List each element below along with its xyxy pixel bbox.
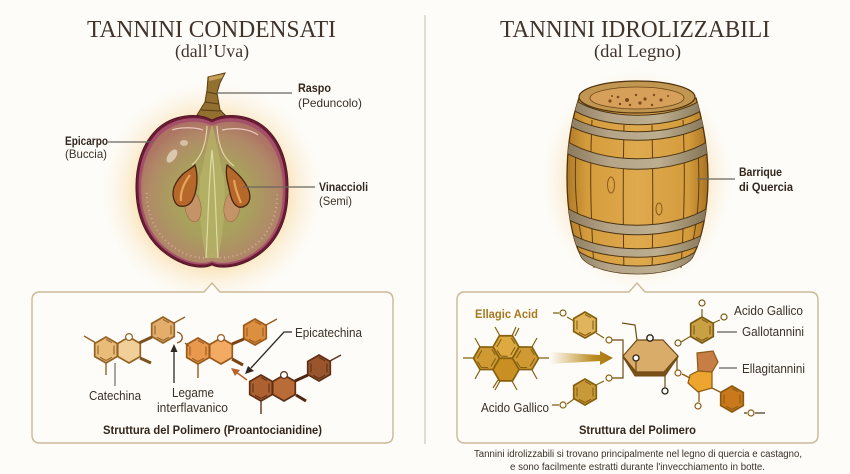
interflavan bond hook <box>177 332 189 346</box>
label: Legame interflavanico: interflavanico <box>157 400 228 415</box>
label: Ellagic Acid: Ellagic Acid <box>475 307 538 321</box>
arrow: interflavan bond <box>170 344 178 383</box>
label: Acido Gallico bottom: Acido Gallico <box>481 400 549 415</box>
panel: condensed tannin polymer <box>32 283 393 443</box>
label: Raspo: (Peduncolo) <box>298 96 362 110</box>
barrel top <box>579 81 695 113</box>
label: Barrique di Quercia: di Quercia <box>739 180 793 194</box>
label: Gallotannini <box>717 324 804 339</box>
caption: polymer structure: Struttura del Polimero <box>579 423 696 437</box>
label: Catechina: Catechina <box>89 388 142 403</box>
title: tannini condensati <box>87 17 336 62</box>
label: Gallotannini: Gallotannini <box>742 324 804 339</box>
label: Vinaccioli: Vinaccioli <box>319 180 368 194</box>
title: tannini condensati: TANNINI CONDENSATI <box>87 17 336 43</box>
molecule: ellagitannin <box>675 351 765 416</box>
label: Legame interflavanico: Legame <box>172 385 214 400</box>
label: Legame interflavanico <box>157 385 228 415</box>
label: Vinaccioli <box>243 180 368 208</box>
label: Raspo <box>217 81 362 110</box>
label: Epicarpo: Epicarpo <box>65 134 108 148</box>
title: tannini condensati: (dall’Uva) <box>175 41 249 62</box>
label: Epicatechina: Epicatechina <box>295 325 363 340</box>
molecule: catechin <box>84 317 185 375</box>
molecule: ellagic acid <box>463 327 549 390</box>
arrow: ellagic to core <box>550 351 613 365</box>
label: Barrique di Quercia <box>697 165 793 194</box>
molecule: gallic acid upper <box>553 310 612 343</box>
footnote: e sono facilmente estratti durante l'invecchiamento in botte. <box>510 462 765 473</box>
title: tannini idrolizzabili: TANNINI IDROLIZZABILI <box>500 17 770 43</box>
label: Acido Gallico top: Acido Gallico <box>734 303 803 318</box>
label: Epicarpo <box>65 134 153 161</box>
barrel body <box>567 98 708 274</box>
grape flesh <box>141 122 283 263</box>
panel: hydrolysable tannin structure <box>457 283 818 443</box>
arrow: orange linkage <box>231 368 247 380</box>
molecule: epicatechin lower <box>250 355 341 414</box>
label: Vinaccioli: (Semi) <box>319 194 352 208</box>
label: Barrique di Quercia: Barrique <box>739 165 782 179</box>
seeds <box>173 165 250 223</box>
pointer line: catechin <box>114 363 116 386</box>
label: Epicarpo: (Buccia) <box>65 147 107 161</box>
molecule: gallic acid lower <box>552 375 612 408</box>
title: tannini idrolizzabili: (dal Legno) <box>594 41 681 62</box>
illustration: grape cross-section <box>100 73 324 304</box>
grape skin <box>136 115 288 267</box>
grape stem <box>197 73 227 123</box>
caption: polymer structure: Struttura del Polimero (Proantocianidine) <box>103 423 322 437</box>
arrow: epicatechin <box>245 332 292 374</box>
molecule: epicatechin upper <box>187 319 277 378</box>
illustration: oak barrel <box>550 78 724 282</box>
label: Ellagitannini <box>719 361 805 376</box>
barrel staves <box>575 120 699 273</box>
footnote <box>474 449 802 473</box>
molecule: glucose core <box>612 323 678 394</box>
title: tannini idrolizzabili <box>500 17 770 62</box>
molecule: gallotannin <box>675 300 727 346</box>
label: Ellagitannini: Ellagitannini <box>742 361 805 376</box>
barrel hoops <box>560 102 715 270</box>
label: Raspo: Raspo <box>298 81 331 95</box>
footnote: Tannini idrolizzabili si trovano principalmente nel legno di quercia e castagno, <box>474 449 802 460</box>
